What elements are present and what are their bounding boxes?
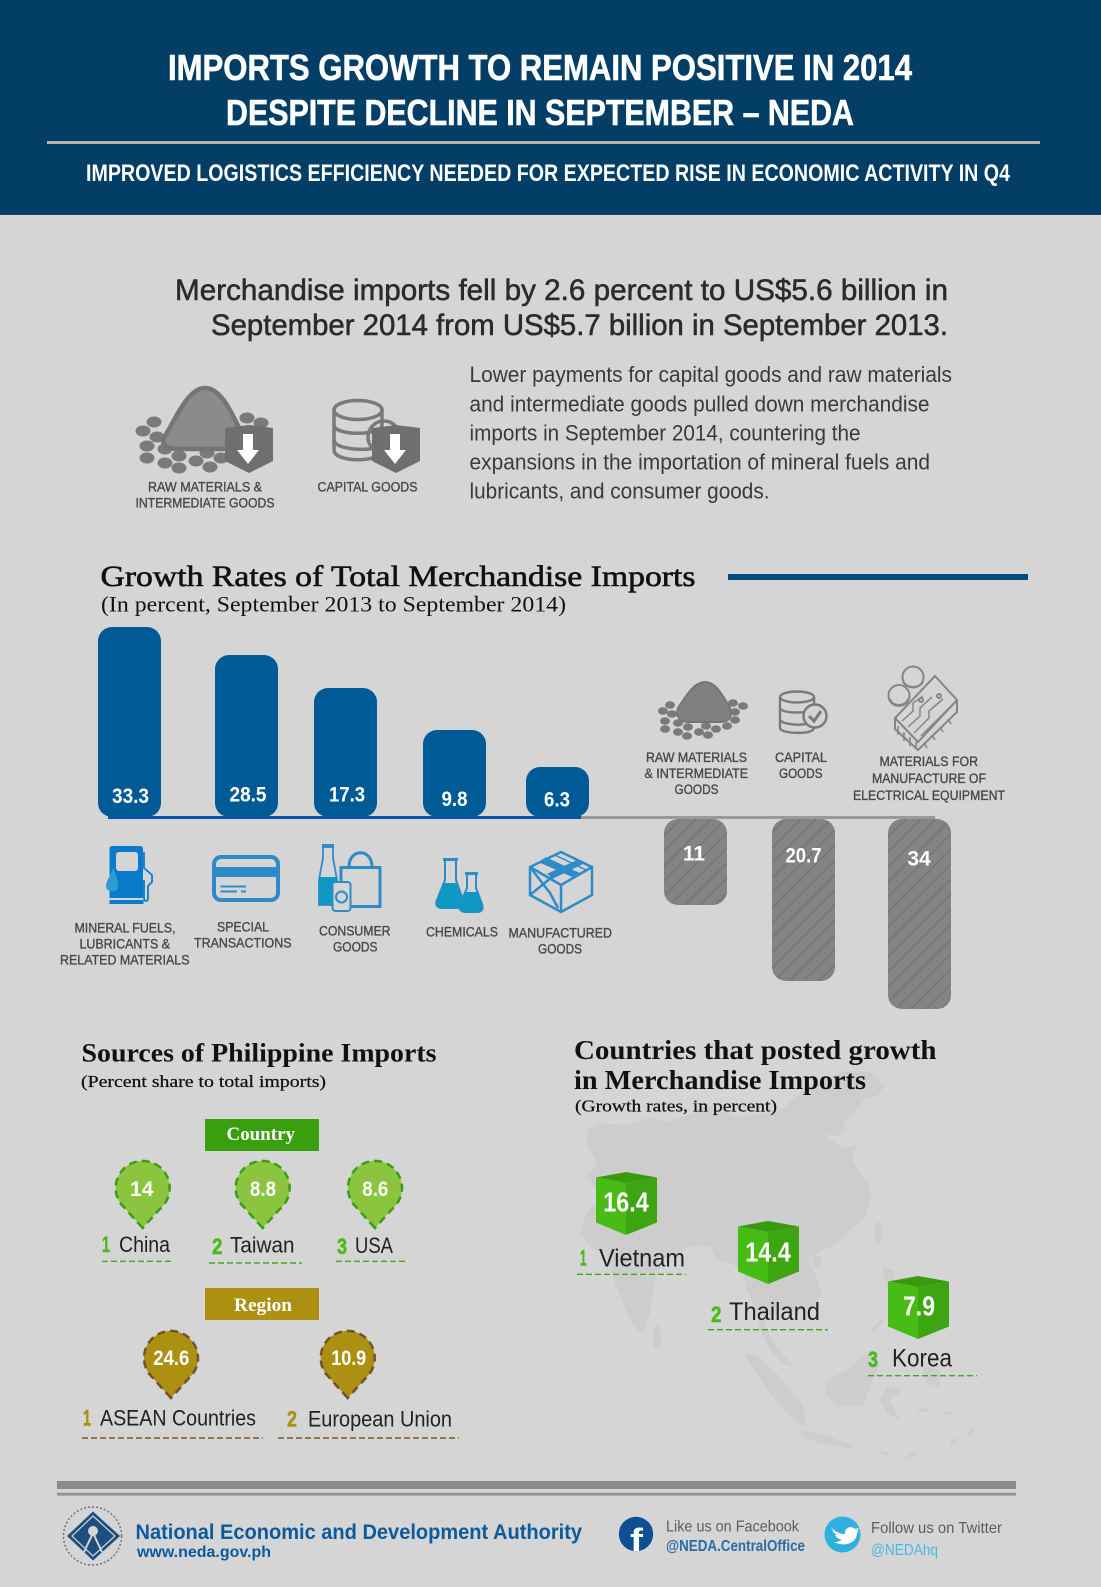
title: IMPORTS GROWTH TO REMAIN POSITIVE IN 2014 <box>168 47 912 88</box>
label: electrical materials: ELECTRICAL EQUIPMENT <box>853 788 1005 803</box>
icon: credit card <box>214 857 278 900</box>
icon: Facebook <box>619 1517 653 1558</box>
bar: special transactions 28.5 <box>215 655 278 817</box>
label: raw materials and intermediate: GOODS <box>674 782 718 797</box>
bar: capital goods 20.7: 20.7 <box>786 844 822 868</box>
label: Taiwan: Taiwan <box>230 1232 294 1258</box>
bar: capital goods 20.7 <box>772 819 835 981</box>
label: capital goods right <box>775 750 827 781</box>
bar: mineral fuels 33.3 <box>98 627 161 817</box>
text: Twitter handle: @NEDAhq <box>871 1542 938 1559</box>
heading: sources: (Percent share to total imports) <box>81 1072 326 1091</box>
lead statement: September 2014 from US$5.7 billion in September 2013. <box>211 309 948 342</box>
label: raw materials: RAW MATERIALS & <box>148 480 262 494</box>
heading: sources: Sources of Philippine Imports <box>82 1038 436 1068</box>
explanatory paragraph: Lower payments for capital goods and raw materials <box>470 362 952 387</box>
label: consumer goods <box>319 924 391 954</box>
text: Twitter handle: Follow us on Twitter <box>871 1520 1003 1537</box>
pin: European Union 10.9: 10.9 <box>331 1347 366 1370</box>
cube: Vietnam 16.4: 16.4 <box>603 1186 649 1218</box>
label: USA <box>336 1233 407 1261</box>
text: Facebook handle: Like us on Facebook <box>666 1518 800 1536</box>
label: electrical materials: MANUFACTURE OF <box>872 771 986 786</box>
heading: countries <box>574 1035 936 1116</box>
label: mineral fuels: LUBRICANTS & <box>80 936 170 952</box>
label: Thailand: Thailand <box>729 1298 820 1326</box>
cube: Korea 7.9 <box>888 1276 949 1339</box>
label: capital goods right: CAPITAL <box>775 750 827 765</box>
header banner <box>0 0 1101 215</box>
bar: consumer goods 17.3 <box>314 688 377 817</box>
explanatory paragraph <box>470 362 952 504</box>
bar: special transactions 28.5: 28.5 <box>230 784 267 806</box>
label: special transactions: TRANSACTIONS <box>194 936 292 950</box>
bar: electrical materials 34: 34 <box>907 848 931 870</box>
pin: USA 8.6: 8.6 <box>362 1178 388 1201</box>
text: Facebook handle <box>666 1518 805 1555</box>
label: consumer goods: CONSUMER <box>319 924 391 938</box>
lead statement: Merchandise imports fell by 2.6 percent to US$5.6 billion in <box>175 274 948 307</box>
bar: manufactured goods 6.3: 6.3 <box>544 788 570 812</box>
tag: country: Country <box>226 1124 295 1145</box>
bar chart: positive growth <box>98 627 589 817</box>
tag: region <box>205 1288 319 1320</box>
icon: chemicals flasks <box>436 858 483 912</box>
label: consumer goods: GOODS <box>333 940 378 954</box>
title <box>168 47 912 133</box>
icon: fuel pump <box>106 846 152 904</box>
tag: region: Region <box>234 1295 292 1316</box>
footer: agency name: www.neda.gov.ph <box>136 1544 271 1561</box>
heading: countries: (Growth rates, in percent) <box>575 1096 777 1116</box>
label: European Union: 2 <box>287 1406 297 1432</box>
label: USA: 3 <box>337 1234 347 1259</box>
panel: countries with growth <box>574 1035 977 1461</box>
heading: growth rates: Growth Rates of Total Merchandise Imports <box>100 560 696 593</box>
label: China: China <box>119 1232 171 1257</box>
bar: mineral fuels 33.3: 33.3 <box>112 785 149 808</box>
icon: capital goods down <box>334 400 420 473</box>
pin: USA 8.6 <box>348 1161 402 1228</box>
icon: circuit chip <box>888 666 957 750</box>
lead statement <box>175 274 948 342</box>
cube: Thailand 14.4: 14.4 <box>745 1236 791 1268</box>
label: mineral fuels <box>60 920 190 968</box>
pin: ASEAN 24.6: 24.6 <box>153 1347 189 1370</box>
label: mineral fuels: MINERAL FUELS, <box>74 920 176 936</box>
pin: China 14 <box>116 1161 170 1228</box>
tag: country <box>205 1119 319 1151</box>
label: electrical materials <box>853 754 1005 803</box>
label: manufactured goods: GOODS <box>538 942 582 956</box>
label: European Union <box>278 1406 459 1438</box>
label: raw materials and intermediate: & INTERMEDIATE <box>644 766 748 781</box>
pin: Taiwan 8.8: 8.8 <box>250 1178 276 1201</box>
pin: Taiwan 8.8 <box>236 1161 290 1228</box>
label: electrical materials: MATERIALS FOR <box>880 754 978 769</box>
bar chart: negative growth <box>664 819 951 1009</box>
label: USA: USA <box>355 1233 393 1258</box>
explanatory paragraph: and intermediate goods pulled down merchandise <box>470 392 930 416</box>
label: ASEAN countries: 1 <box>83 1406 91 1430</box>
heading: growth rates: (In percent, September 2013 to September 2014) <box>101 592 566 616</box>
heading: countries: in Merchandise Imports <box>574 1065 866 1095</box>
label: Korea: 3 <box>868 1347 878 1372</box>
icon: Facebook: f <box>630 1522 643 1558</box>
pin: China 14: 14 <box>130 1178 154 1201</box>
bar: manufactured goods 6.3 <box>526 767 589 817</box>
label: special transactions <box>194 920 292 950</box>
icon: package box <box>530 852 592 912</box>
icon: raw materials down <box>136 388 273 474</box>
label: raw materials and intermediate <box>644 750 748 797</box>
bar: electrical materials 34 <box>888 819 951 1009</box>
label: special transactions: SPECIAL <box>217 920 269 934</box>
heading: countries: Countries that posted growth <box>574 1035 936 1065</box>
cube: Vietnam 16.4 <box>596 1172 657 1235</box>
title: DESPITE DECLINE IN SEPTEMBER – NEDA <box>226 92 854 133</box>
label: China <box>102 1232 173 1261</box>
icon: raw materials small <box>658 682 748 740</box>
label: chemicals: CHEMICALS <box>426 924 498 940</box>
footer: agency name: National Economic and Development Authority <box>136 1521 582 1544</box>
cube: Korea 7.9: 7.9 <box>903 1290 935 1322</box>
label: European Union: European Union <box>308 1406 452 1432</box>
label: Taiwan <box>209 1232 302 1263</box>
bar: chemicals 9.8: 9.8 <box>442 788 468 811</box>
explanatory paragraph: imports in September 2014, countering the <box>470 420 860 446</box>
footer: NEDA logo <box>64 1507 122 1565</box>
explanatory paragraph: lubricants, and consumer goods. <box>470 478 770 504</box>
bar: raw materials 11: 11 <box>683 842 705 866</box>
label: Vietnam: 1 <box>580 1246 586 1270</box>
label: ASEAN countries: ASEAN Countries <box>100 1406 256 1430</box>
label: China: 1 <box>102 1232 110 1257</box>
label: ASEAN countries <box>82 1406 263 1438</box>
label: Thailand: 2 <box>711 1302 722 1327</box>
label: manufactured goods: MANUFACTURED <box>508 926 612 940</box>
bar: chemicals 9.8 <box>423 730 486 817</box>
icon: capital goods small <box>780 692 826 733</box>
map of Asia <box>580 1072 976 1461</box>
label: raw materials: INTERMEDIATE GOODS <box>136 496 274 510</box>
cube: Thailand 14.4 <box>738 1221 799 1284</box>
pin: European Union 10.9 <box>321 1331 375 1398</box>
label: capital goods right: GOODS <box>779 766 822 781</box>
bar: raw materials 11 <box>664 819 727 905</box>
label: Korea <box>868 1344 977 1376</box>
pin: ASEAN 24.6 <box>144 1331 198 1398</box>
label: raw materials <box>136 480 274 510</box>
panel: sources of imports <box>81 1038 459 1438</box>
icon: Twitter <box>824 1516 860 1552</box>
label: manufactured goods <box>508 926 612 956</box>
footer: agency name <box>136 1521 582 1561</box>
text: Twitter handle <box>871 1520 1003 1559</box>
label: Vietnam: Vietnam <box>599 1244 685 1272</box>
label: Korea: Korea <box>892 1344 952 1372</box>
label: capital goods: CAPITAL GOODS <box>318 480 418 494</box>
text: Facebook handle: @NEDA.CentralOffice <box>666 1538 805 1555</box>
label: raw materials and intermediate: RAW MATERIALS <box>646 750 747 765</box>
label: mineral fuels: RELATED MATERIALS <box>60 952 190 968</box>
explanatory paragraph: expansions in the importation of mineral fuels and <box>470 450 930 474</box>
heading: growth rates <box>100 560 696 616</box>
icon: consumer goods <box>319 844 380 911</box>
bar: consumer goods 17.3: 17.3 <box>329 784 365 806</box>
label: Taiwan: 2 <box>212 1234 222 1259</box>
heading: sources <box>81 1038 436 1091</box>
